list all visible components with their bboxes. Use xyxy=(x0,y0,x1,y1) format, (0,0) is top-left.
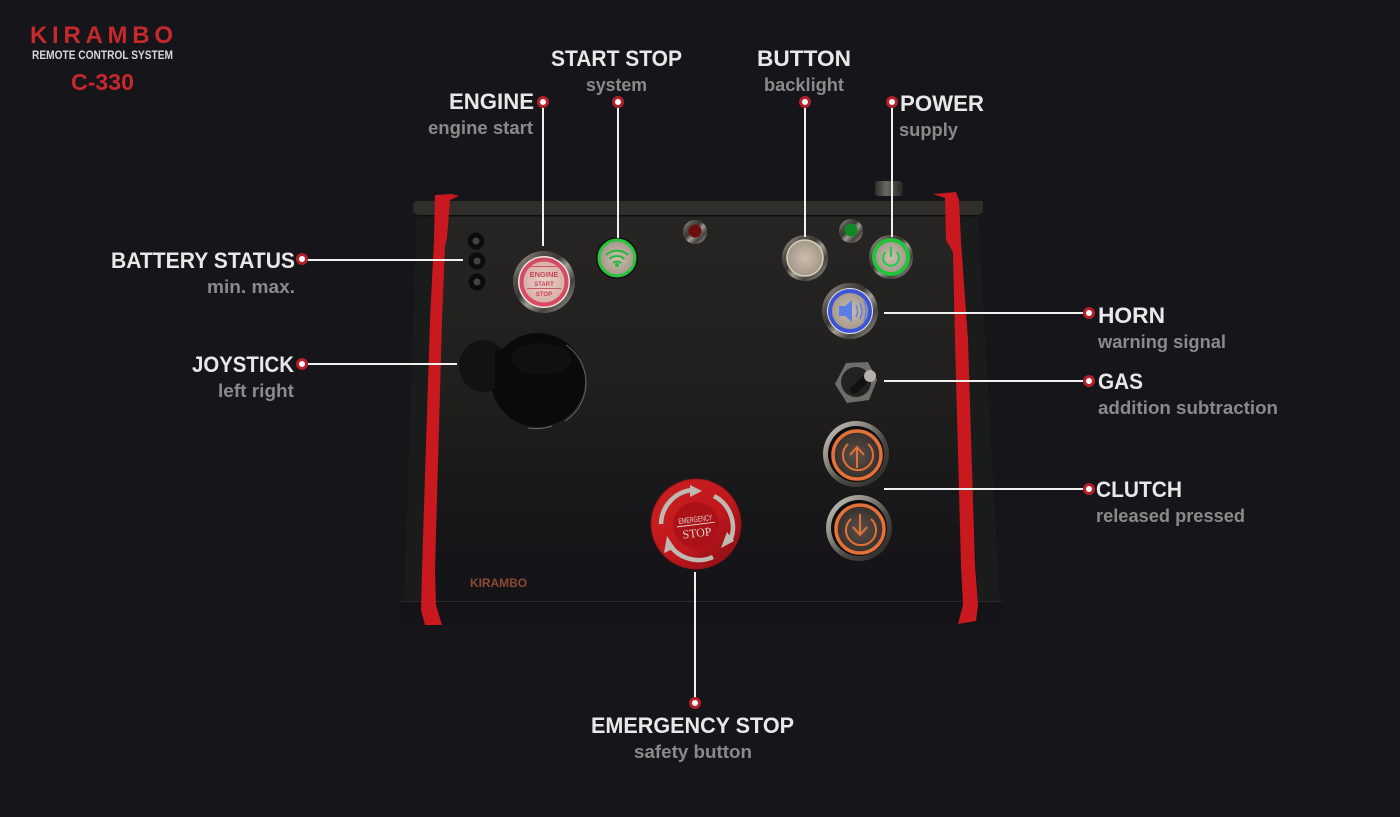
label: battery status: BATTERY STATUS xyxy=(111,248,295,273)
engine start button xyxy=(513,251,575,313)
brand block xyxy=(30,22,173,95)
label: start stop xyxy=(551,46,682,238)
label: battery status xyxy=(111,248,463,297)
label: emergency stop: EMERGENCY STOP xyxy=(591,713,794,738)
right side strip xyxy=(960,215,1000,602)
red indicator LED xyxy=(683,220,707,244)
emergency stop button: EMERGENCY xyxy=(678,513,713,526)
gas toggle switch xyxy=(835,362,877,403)
joystick xyxy=(459,333,586,429)
brand name: KIRAMBO xyxy=(30,22,173,49)
label: emergency stop: safety button xyxy=(634,742,752,762)
label: battery status: min. max. xyxy=(207,277,295,297)
label: button: backlight xyxy=(764,75,844,95)
panel body xyxy=(400,215,1002,612)
label: start stop: START STOP xyxy=(551,46,682,71)
label: engine xyxy=(428,89,548,246)
label: horn: warning signal xyxy=(1097,332,1226,352)
green indicator LED xyxy=(839,219,863,243)
label: button: BUTTON xyxy=(757,46,851,71)
label: emergency stop xyxy=(591,572,794,762)
model number: C-330 xyxy=(71,69,134,95)
label: clutch: released pressed xyxy=(1096,506,1245,526)
label: horn xyxy=(884,303,1226,352)
engine start button: ENGINE xyxy=(530,270,558,279)
left side strip xyxy=(404,215,435,602)
engine start button: START xyxy=(534,282,554,288)
label: horn: HORN xyxy=(1098,303,1165,328)
label: joystick: left right xyxy=(218,381,294,401)
label: power: POWER xyxy=(900,91,984,116)
start stop wifi button xyxy=(596,237,638,279)
emergency stop button xyxy=(651,479,741,569)
panel logo: KIRAMBO xyxy=(470,578,527,590)
knob on top xyxy=(875,181,903,196)
label: engine: engine start xyxy=(428,118,533,138)
emergency stop button: STOP xyxy=(682,524,713,542)
battery status lamps xyxy=(467,232,486,291)
label: start stop: system xyxy=(586,75,647,95)
label: gas: addition subtraction xyxy=(1098,398,1278,418)
label: joystick xyxy=(192,352,457,401)
control panel device xyxy=(400,181,1002,626)
label: power xyxy=(888,91,984,237)
left red bumper xyxy=(421,194,459,625)
right red bumper xyxy=(933,192,978,624)
backlight button xyxy=(782,235,828,281)
power button xyxy=(869,235,913,279)
label: power: supply xyxy=(899,120,958,140)
engine start button: STOP xyxy=(536,292,552,298)
label: joystick: JOYSTICK xyxy=(192,352,295,377)
clutch down button xyxy=(826,495,892,561)
label: clutch: CLUTCH xyxy=(1096,477,1182,502)
label: gas xyxy=(884,369,1278,418)
horn button xyxy=(822,283,878,339)
label: clutch xyxy=(884,477,1245,526)
label: engine: ENGINE xyxy=(449,89,534,114)
label: gas: GAS xyxy=(1098,369,1143,394)
panel bottom strip xyxy=(400,602,1002,626)
panel top band xyxy=(413,201,983,215)
brand subtitle: REMOTE CONTROL SYSTEM xyxy=(32,50,173,62)
label: button xyxy=(757,46,851,237)
clutch up button xyxy=(823,421,889,487)
